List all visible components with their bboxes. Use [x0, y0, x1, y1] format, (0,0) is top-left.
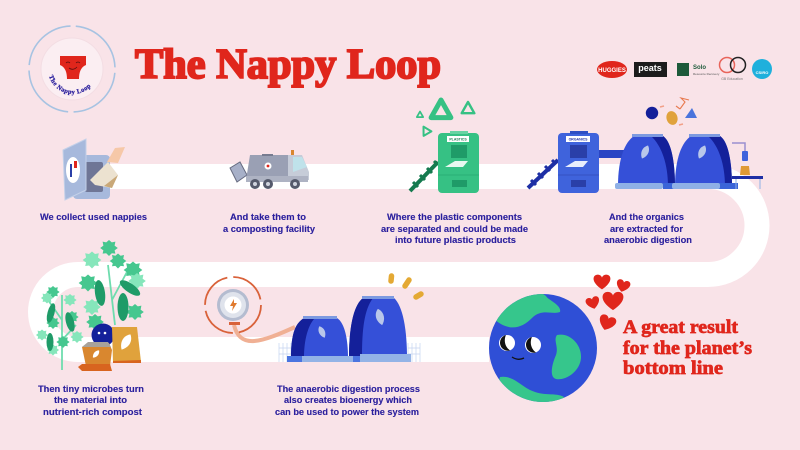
white loop path — [41, 176, 757, 350]
text: step 5: the material into — [54, 395, 128, 405]
logo: CSIRO: CSIRO — [756, 70, 768, 75]
icon: smiling earth — [489, 294, 597, 402]
text: step 6: The anaerobic digestion process — [277, 384, 420, 394]
text: step 4: are extracted for — [610, 224, 684, 234]
logo: Solo — [677, 63, 720, 76]
text: step 3: into future plastic products — [395, 235, 516, 245]
logo: Peats — [634, 62, 667, 77]
logo: Huggies: HUGGIES — [598, 68, 626, 74]
icon: plastics sorting machine — [410, 131, 479, 193]
icon: organics machine and digesters: ORGANICS — [569, 138, 588, 142]
text: conclusion: for the planet’s — [623, 339, 752, 359]
text: step 5 — [38, 384, 144, 417]
icon: energy rays — [391, 276, 421, 297]
text: conclusion: A great result — [623, 318, 739, 338]
text: step 2 — [223, 212, 315, 234]
icon: organics machine and digesters — [528, 131, 763, 193]
logo: Huggies — [597, 61, 627, 78]
icon: plastics sorting machine: PLASTICS — [449, 138, 467, 142]
text: step 2: a composting facility — [223, 224, 315, 234]
logo badge — [28, 25, 116, 113]
icon: energy gauge — [205, 277, 295, 341]
icon: plants and compost bags — [36, 240, 146, 371]
text: step 3 — [381, 212, 528, 245]
text: step 6: also creates bioenergy which — [284, 395, 412, 405]
text: step 4: anaerobic digestion — [604, 235, 692, 245]
logo: GB Education: GB Education — [721, 77, 743, 81]
icon: digester tanks — [279, 296, 420, 362]
icon: recycling arrows — [417, 100, 474, 136]
icon: nappy — [60, 56, 86, 79]
text: step 3: Where the plastic components — [387, 212, 522, 222]
logo: Solo: Solo — [693, 65, 706, 71]
logo: GB Education — [720, 58, 746, 81]
title: The Nappy Loop — [135, 42, 441, 88]
badge text: The Nappy Loop — [49, 74, 91, 96]
text: step 1: We collect used nappies — [40, 212, 147, 222]
icon: hearts — [585, 275, 631, 333]
text: conclusion — [623, 318, 752, 379]
logo: Peats: peats — [638, 63, 662, 73]
text: conclusion: bottom line — [623, 359, 723, 379]
logo: Solo: Resource Recovery — [693, 72, 720, 76]
text: step 4: And the organics — [609, 212, 684, 222]
text: step 4 — [604, 212, 692, 245]
partner logos — [597, 58, 772, 81]
text: step 2: And take them to — [230, 212, 307, 222]
text: step 3: are separated and could be made — [381, 224, 528, 234]
text: step 5: Then tiny microbes turn — [38, 384, 144, 394]
icon: microbes — [646, 98, 697, 126]
icon: garbage truck — [230, 150, 309, 189]
text: step 6 — [275, 384, 420, 417]
icon: bin with hand and nappy — [63, 139, 125, 200]
logo: CSIRO — [752, 59, 772, 79]
text: step 6: can be used to power the system — [275, 407, 419, 417]
text: step 5: nutrient-rich compost — [43, 407, 142, 417]
